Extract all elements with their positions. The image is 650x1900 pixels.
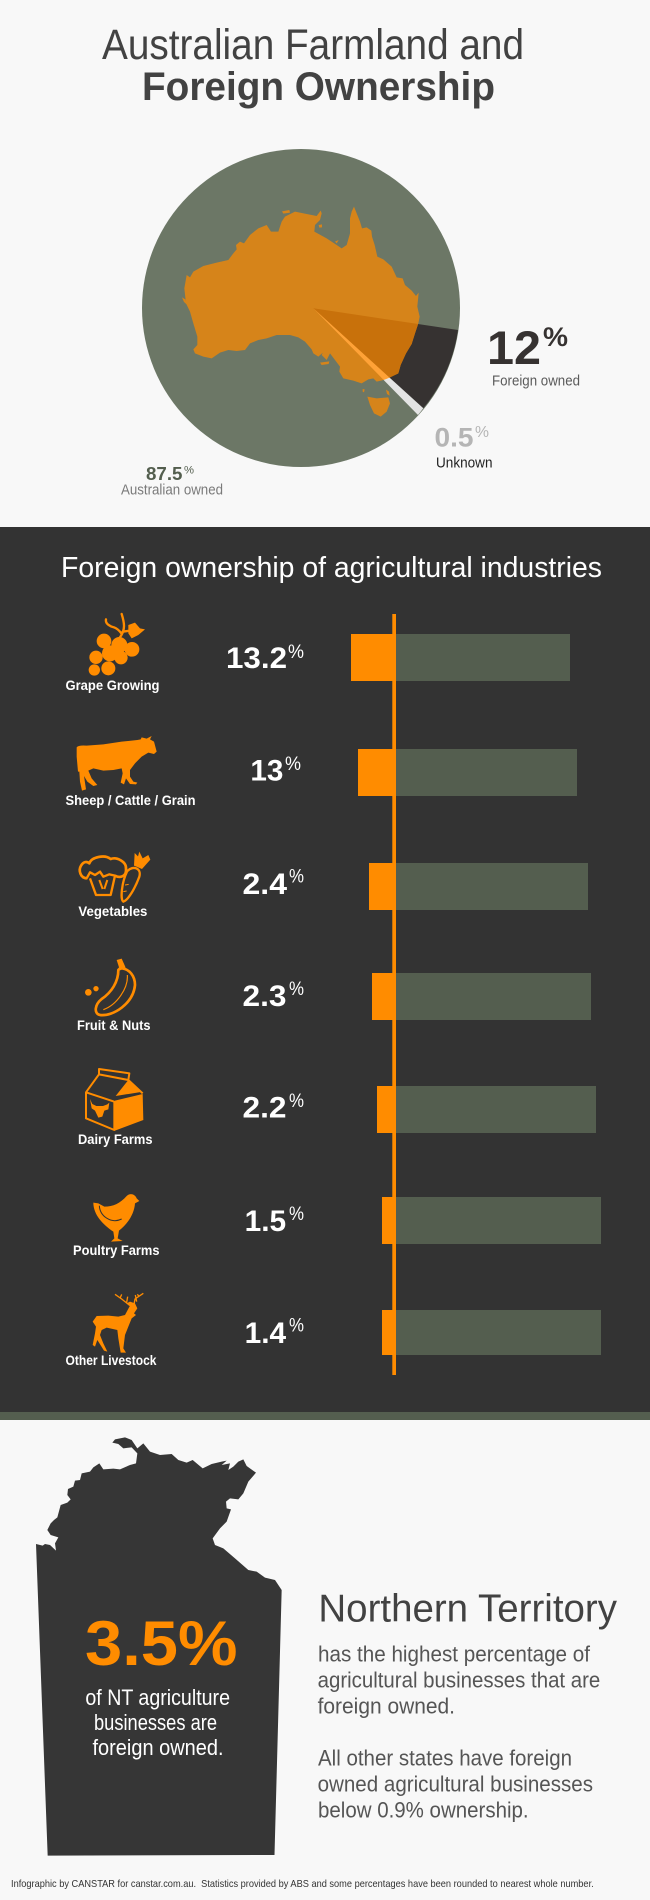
row: dairy farms: Dairy Farms	[78, 1131, 153, 1147]
value: 1.5%: %	[289, 1204, 304, 1225]
value: 1.5%	[245, 1204, 304, 1238]
value: 2.2%	[242, 1091, 304, 1125]
value: 13.2%: 13.2	[226, 642, 287, 675]
text block: Northern Territory details	[318, 1642, 600, 1823]
text block: Northern Territory details: All other states have foreign	[318, 1746, 572, 1771]
row: fruit and nuts	[77, 959, 304, 1033]
stat: 12% foreign owned: 12	[487, 321, 541, 374]
title	[102, 21, 524, 109]
stat: 0.5% unknown: 0.5	[434, 422, 474, 452]
stat: 0.5% unknown: Unknown	[436, 454, 492, 472]
row: other livestock: Other Livestock	[66, 1352, 157, 1368]
value: 1.5%: 1.5	[245, 1205, 286, 1238]
stat: 0.5% unknown	[434, 422, 492, 472]
bar: vegetables	[369, 863, 588, 910]
pie slice: foreign owned	[313, 308, 458, 408]
text block: Northern Territory details: owned agricultural businesses	[318, 1772, 593, 1797]
bar: fruit and nuts	[372, 973, 591, 1020]
bar chart	[351, 614, 601, 1375]
row: dairy farms	[78, 1069, 304, 1147]
stat: 87.5% Australian owned: Australian owned	[121, 482, 223, 499]
bar: poultry farms	[382, 1197, 601, 1244]
NT caption	[85, 1685, 230, 1760]
stat: 12% foreign owned	[487, 321, 580, 390]
row: other livestock	[66, 1293, 304, 1368]
bar chart axis	[392, 614, 396, 1375]
icon: milk carton	[86, 1069, 143, 1131]
row: vegetables	[78, 852, 304, 919]
panel heading: Foreign ownership of agricultural industries	[61, 552, 602, 584]
stat: 12% foreign owned: %	[543, 322, 568, 352]
stat: 3.5%: 3.5%	[85, 1609, 238, 1679]
bar: other livestock	[382, 1310, 601, 1355]
panel: Northern Territory map	[36, 1437, 282, 1856]
bar: grape growing	[351, 634, 570, 681]
value: 2.2%: %	[289, 1091, 304, 1112]
row: vegetables: Vegetables	[78, 903, 148, 919]
pie slice: unknown	[313, 308, 423, 415]
title: Australian Farmland and	[102, 21, 524, 69]
stat: 87.5% Australian owned	[121, 464, 223, 499]
value: 2.3%: %	[289, 979, 304, 1000]
value: 13%: %	[285, 754, 301, 775]
value: 1.4%: %	[289, 1316, 304, 1337]
heading: Northern Territory: Northern Territory	[318, 1588, 617, 1631]
pie chart: farmland ownership	[142, 149, 460, 467]
map: Northern Territory silhouette	[36, 1437, 282, 1856]
value: 2.4%: %	[289, 867, 304, 888]
row: poultry farms: Poultry Farms	[73, 1242, 160, 1258]
value: 1.4%	[245, 1316, 304, 1350]
NT caption: of NT agriculture	[85, 1685, 230, 1710]
icon: deer	[93, 1293, 143, 1353]
stat: 12% foreign owned: Foreign owned	[492, 372, 580, 390]
stat: 0.5% unknown: %	[475, 424, 489, 441]
value: 2.2%: 2.2	[242, 1092, 286, 1125]
map: Australia	[182, 207, 420, 417]
text block: Northern Territory details: below 0.9% ownership.	[318, 1798, 529, 1823]
stat: 87.5% Australian owned: 87.5	[146, 464, 182, 484]
panel: foreign ownership of agricultural industries	[0, 527, 650, 1420]
stat: 87.5% Australian owned: %	[184, 465, 194, 477]
NT caption: businesses are	[94, 1710, 217, 1735]
bar: sheep cattle grain	[358, 749, 577, 796]
text block: Northern Territory details: has the highest percentage of	[318, 1642, 591, 1667]
text block: Northern Territory details: foreign owned.	[318, 1693, 455, 1718]
title: Foreign Ownership	[142, 65, 495, 109]
icon: grapes	[89, 614, 145, 676]
row: sheep cattle grain	[66, 736, 301, 808]
value: 13%: 13	[250, 755, 283, 788]
value: 2.4%: 2.4	[242, 868, 287, 901]
row: sheep cattle grain: Sheep / Cattle / Grain	[66, 792, 196, 808]
row: poultry farms	[73, 1194, 304, 1258]
icon: banana and nuts	[85, 959, 135, 1015]
value: 2.3%	[242, 979, 304, 1013]
icon: broccoli and carrot	[80, 852, 150, 902]
row: grape growing	[66, 614, 304, 693]
text block: Northern Territory details: agricultural businesses that are	[318, 1667, 600, 1692]
row: fruit and nuts: Fruit & Nuts	[77, 1017, 151, 1033]
value: 13.2%: %	[288, 642, 304, 663]
NT caption: foreign owned.	[92, 1735, 224, 1760]
value: 1.4%: 1.4	[245, 1317, 286, 1350]
row: grape growing: Grape Growing	[66, 677, 160, 693]
bar: dairy farms	[377, 1086, 596, 1133]
value: 2.3%: 2.3	[242, 980, 286, 1013]
value: 13%	[250, 754, 301, 788]
value: 2.4%	[242, 867, 304, 901]
map overlap: foreign owned share	[314, 308, 418, 380]
icon: cow	[77, 736, 157, 791]
icon: chicken	[93, 1194, 139, 1242]
